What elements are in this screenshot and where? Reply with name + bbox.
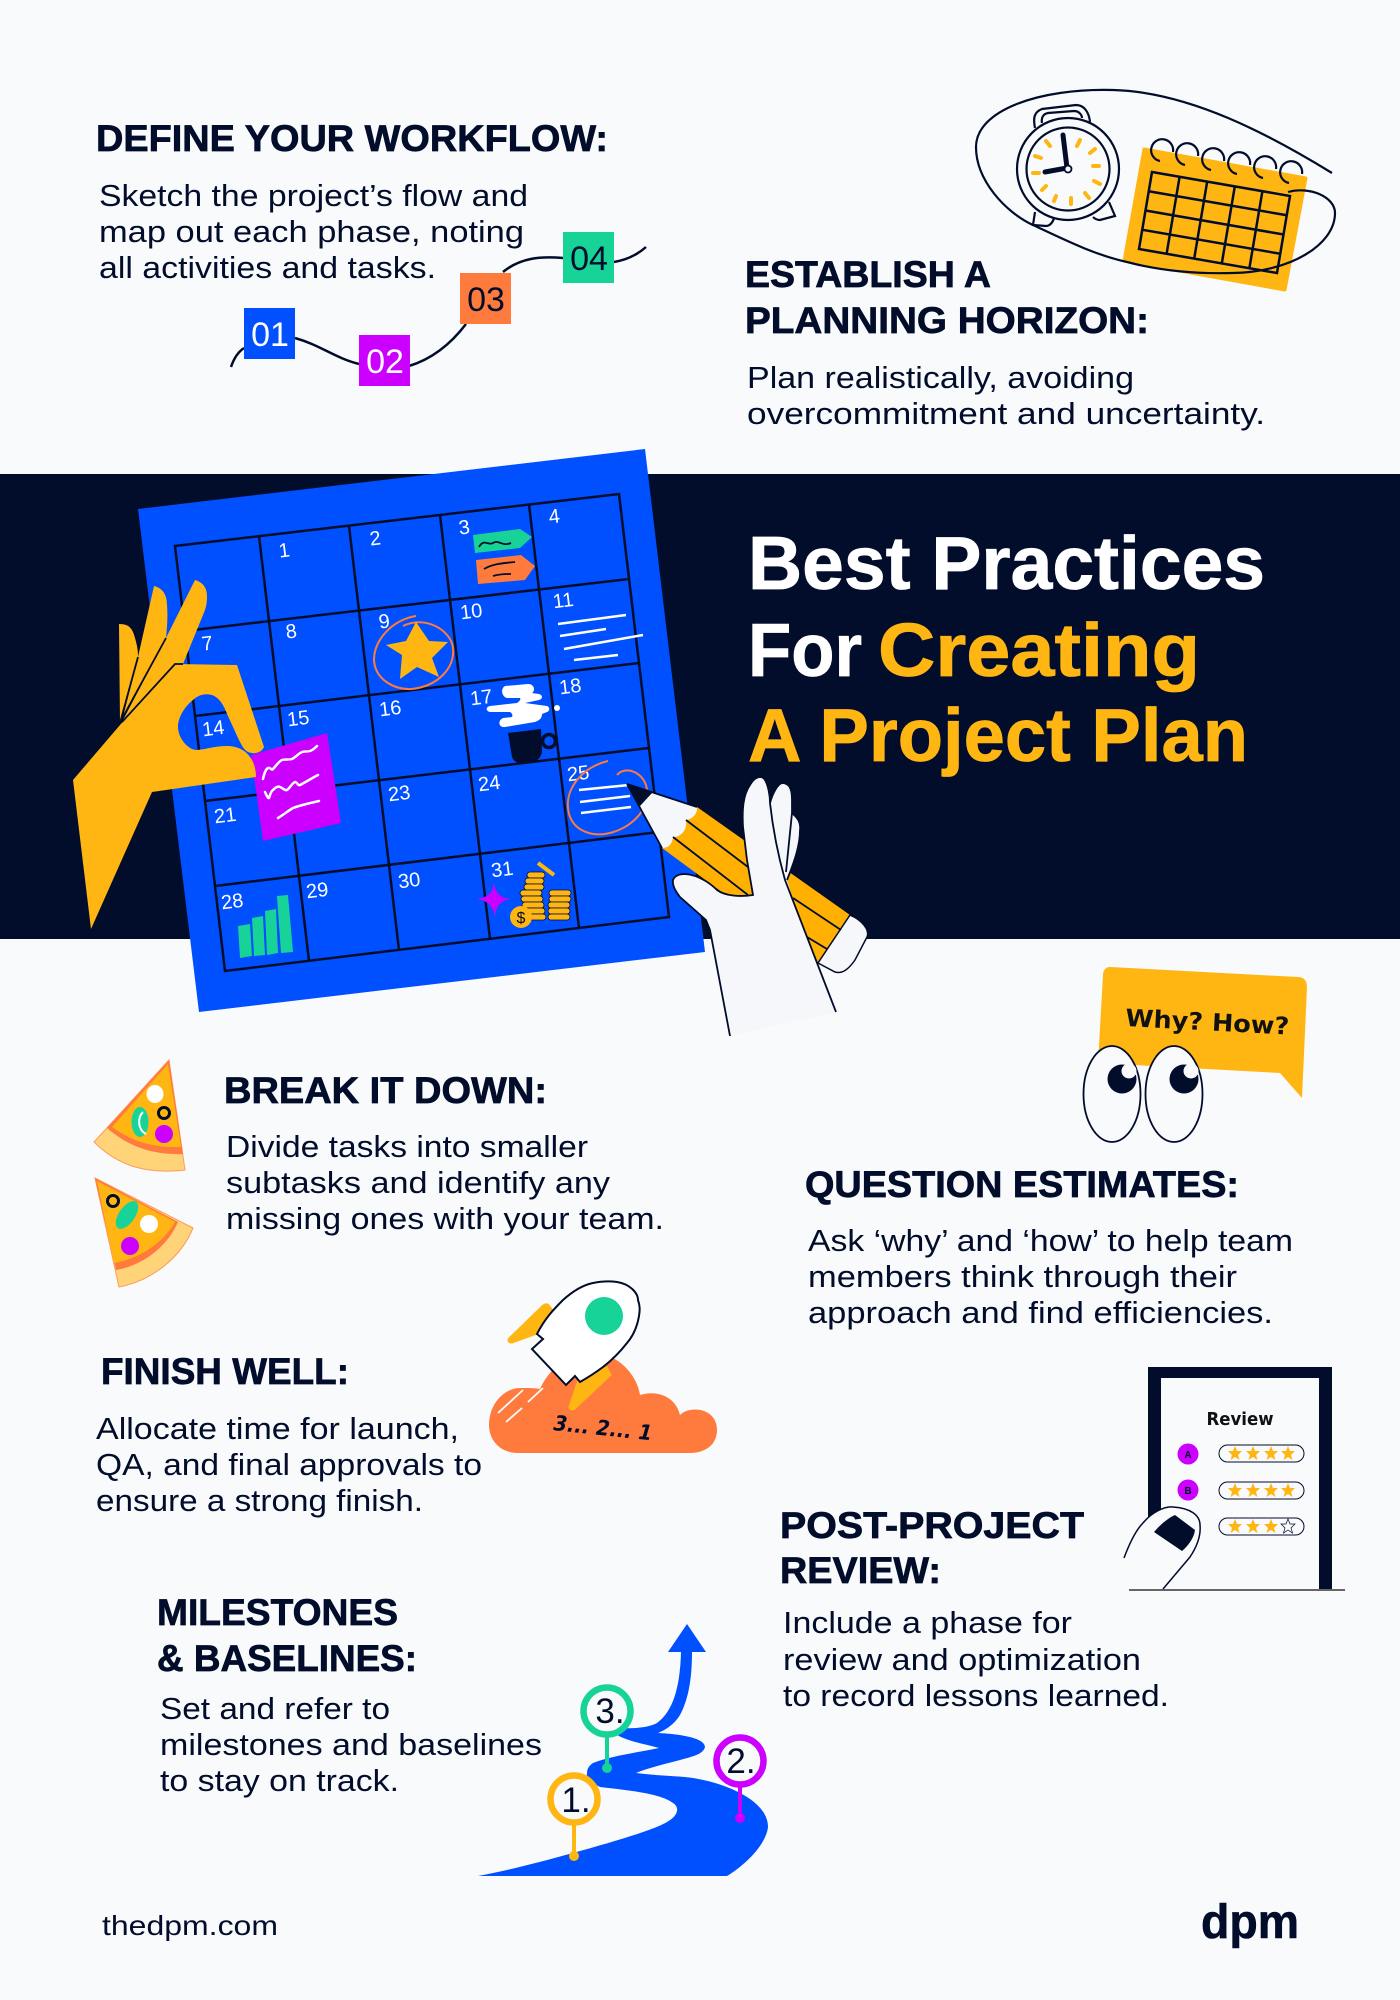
calendar dates: 14	[201, 717, 226, 741]
text block: define your workflow: map out each phase, noting	[99, 214, 524, 249]
icon: pizza slices	[94, 1060, 193, 1287]
dark title band	[0, 474, 1400, 939]
heading: planning horizon	[745, 254, 1149, 341]
icon: coffee cup	[487, 684, 560, 763]
panel: calendar sheet	[138, 449, 705, 1012]
calendar dates: 29	[305, 879, 330, 903]
chart: milestone road with pins: 2.	[726, 1742, 756, 1781]
icon: review sheet: A	[1184, 1450, 1192, 1461]
logo: dpm: dpm	[1201, 1896, 1299, 1949]
title: Creating	[878, 608, 1200, 692]
text block: break it down: subtasks and identify any	[226, 1165, 611, 1200]
text block: define your workflow	[99, 178, 528, 285]
calendar dates: 1	[277, 539, 291, 563]
calendar dates: 2	[368, 527, 382, 551]
icon: review sheet: Review	[1206, 1409, 1274, 1430]
icon: rocket and cloud: 3... 2... 1	[552, 1411, 653, 1445]
icon: rocket and cloud	[489, 1281, 717, 1453]
heading: milestones and baselines	[157, 1592, 417, 1679]
text block: define your workflow: Sketch the project’s flow and	[99, 178, 528, 213]
icon: review sheet	[1124, 1367, 1345, 1590]
heading: post-project review: POST-PROJECT	[780, 1505, 1084, 1546]
workflow steps diagram: 01	[251, 316, 289, 354]
heading: planning horizon: PLANNING HORIZON:	[745, 300, 1149, 341]
icon: eyes and speech bubble	[1084, 967, 1307, 1142]
heading: post-project review: REVIEW:	[780, 1550, 941, 1591]
heading: post-project review	[780, 1505, 1084, 1591]
text block: finish well: ensure a strong finish.	[96, 1483, 423, 1518]
text block: define your workflow: all activities and tasks.	[99, 250, 436, 285]
text block: milestones and baselines: to stay on track.	[160, 1763, 399, 1798]
calendar dates: 23	[387, 782, 412, 806]
heading: question estimates: QUESTION ESTIMATES:	[805, 1164, 1239, 1205]
text block: post-project review: review and optimization	[783, 1642, 1141, 1677]
text block: milestones and baselines	[160, 1691, 542, 1798]
icon: coins and sparkle: $	[517, 910, 526, 927]
calendar grid	[175, 494, 669, 971]
text block: planning horizon: overcommitment and uncertainty.	[747, 396, 1265, 431]
heading: finish well: FINISH WELL:	[101, 1351, 349, 1392]
icon: note lines	[558, 615, 643, 660]
calendar dates: 10	[459, 600, 484, 624]
text block: break it down	[226, 1129, 664, 1236]
illustration: pencil	[627, 784, 868, 972]
calendar dates	[200, 505, 591, 914]
workflow steps diagram	[231, 232, 646, 386]
heading: define your workflow: DEFINE YOUR WORKFLOW:	[96, 118, 608, 159]
calendar dates: 15	[286, 707, 311, 731]
calendar dates: 21	[213, 804, 238, 828]
chart: milestone road with pins	[478, 1624, 768, 1876]
title: A Project Plan	[748, 693, 1248, 777]
text block: break it down: missing ones with your team.	[226, 1201, 664, 1236]
text block: post-project review	[783, 1605, 1169, 1713]
text block: milestones and baselines: milestones and baselines	[160, 1727, 542, 1762]
icon: coins and sparkle	[477, 863, 571, 928]
text block: question estimates: Ask ‘why’ and ‘how’ to help team	[808, 1223, 1293, 1258]
title: Best Practices	[748, 521, 1265, 605]
calendar dates: 24	[477, 772, 502, 796]
title: For	[748, 608, 862, 692]
chart: milestone road with pins: 3.	[595, 1692, 625, 1731]
text block: finish well: Allocate time for launch,	[96, 1411, 459, 1446]
heading: milestones and baselines: MILESTONES	[157, 1592, 398, 1633]
text block: post-project review: Include a phase for	[783, 1605, 1072, 1640]
text block: milestones and baselines: Set and refer to	[160, 1691, 390, 1726]
text block: question estimates: approach and find efficiencies.	[808, 1295, 1273, 1330]
title	[748, 521, 1265, 777]
calendar dates: 7	[200, 632, 214, 656]
text block: finish well: QA, and final approvals to	[96, 1447, 482, 1482]
calendar dates: 4	[547, 505, 561, 529]
icon: tags	[473, 529, 535, 584]
icon: review sheet: B	[1184, 1486, 1192, 1497]
heading: break it down: BREAK IT DOWN:	[224, 1070, 547, 1111]
heading: milestones and baselines: & BASELINES:	[157, 1638, 417, 1679]
text block: break it down: Divide tasks into smaller	[226, 1129, 588, 1164]
illustration: white hand	[673, 777, 836, 1036]
text block: question estimates: members think through their	[808, 1259, 1237, 1294]
text block: planning horizon	[747, 360, 1265, 431]
calendar dates: 3	[457, 516, 471, 540]
icon: bar chart	[238, 895, 293, 958]
calendar dates: 25	[566, 762, 591, 786]
calendar dates: 8	[284, 620, 298, 644]
icon: clock and calendar	[976, 90, 1335, 290]
icon: circled note	[568, 761, 647, 834]
calendar dates: 28	[220, 890, 245, 914]
chart: milestone road with pins: 1.	[561, 1781, 591, 1820]
illustration: yellow hand	[73, 580, 264, 929]
text block: planning horizon: Plan realistically, avoiding	[747, 360, 1134, 395]
text block: question estimates	[808, 1223, 1293, 1330]
calendar dates: 9	[377, 610, 391, 634]
calendar dates: 16	[378, 697, 403, 721]
calendar dates: 17	[469, 686, 494, 710]
text block: post-project review: to record lessons learned.	[783, 1678, 1169, 1713]
workflow steps diagram: 03	[467, 281, 505, 319]
icon: star with circle	[374, 616, 453, 689]
heading: planning horizon: ESTABLISH A	[745, 254, 991, 295]
text block: finish well	[96, 1411, 482, 1518]
workflow steps diagram: 02	[366, 343, 404, 381]
icon: eyes and speech bubble: Why? How?	[1125, 1004, 1290, 1041]
calendar dates: 30	[397, 869, 422, 893]
calendar dates: 31	[490, 858, 515, 882]
calendar dates: 11	[552, 589, 575, 613]
calendar dates: 18	[558, 675, 583, 699]
icon: sticky note	[251, 733, 341, 841]
footer url: thedpm.com	[102, 1910, 278, 1941]
workflow steps diagram: 04	[570, 240, 608, 278]
